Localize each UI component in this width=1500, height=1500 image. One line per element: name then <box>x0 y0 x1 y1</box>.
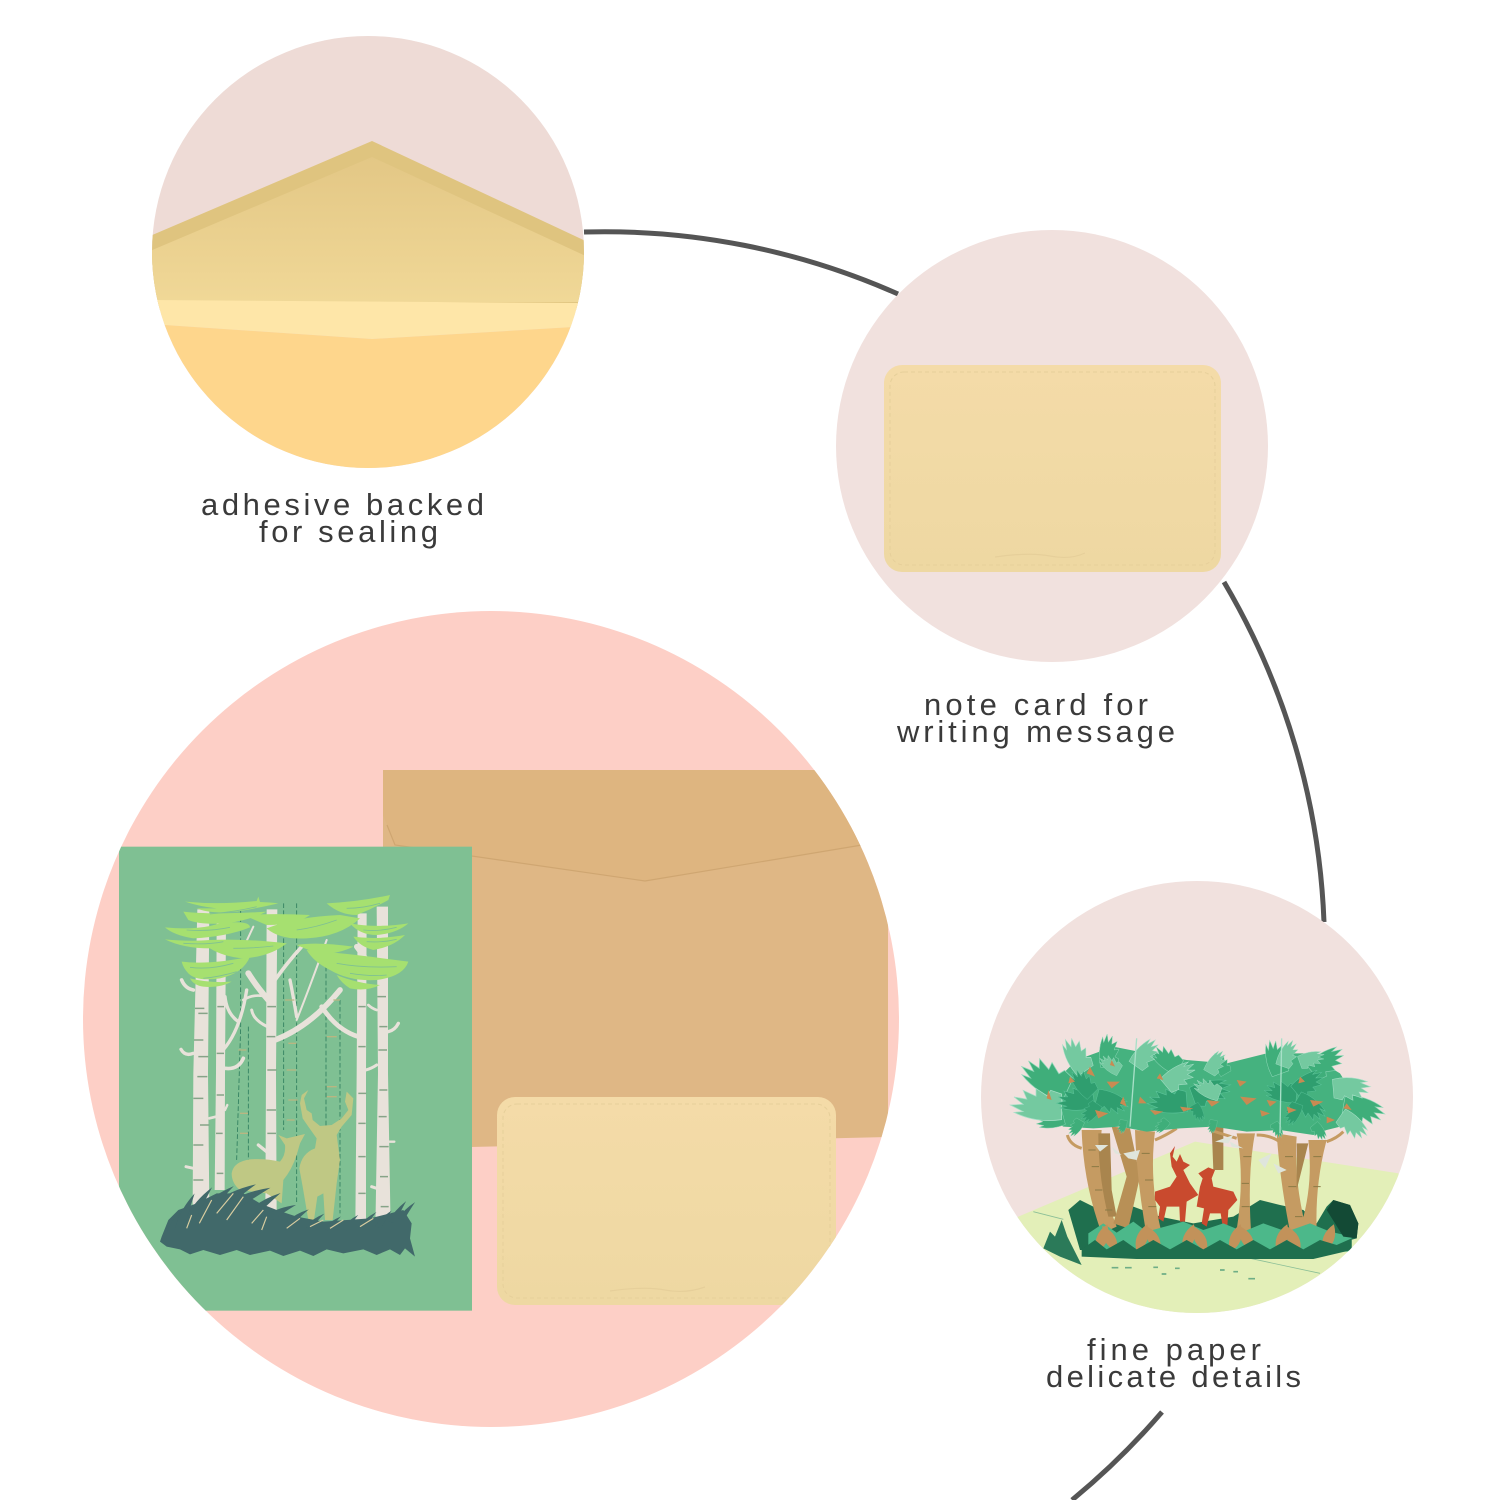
orange leaves row <box>1091 1222 1340 1254</box>
grass blades <box>167 1210 181 1233</box>
envelope body <box>150 324 590 470</box>
envelope <box>383 770 888 1147</box>
label: fine paper: delicate details <box>1046 1359 1301 1394</box>
grass slits <box>187 1193 373 1230</box>
connector arc: top <box>584 232 898 294</box>
grass <box>160 1184 415 1256</box>
label: note card <box>896 687 1175 749</box>
label: adhesive backed: for sealing <box>259 514 438 549</box>
note card <box>884 365 1221 572</box>
birds <box>1095 1135 1287 1173</box>
label: note card: writing message <box>896 714 1175 749</box>
outer fronds <box>1015 1033 1387 1143</box>
label: note card: note card for <box>924 687 1148 722</box>
envelope flap face <box>152 174 584 302</box>
inner fronds <box>1056 1070 1326 1126</box>
card fold lines <box>1033 1212 1320 1273</box>
note card <box>497 1097 836 1305</box>
envelope flap rim <box>150 141 590 310</box>
deer: stag <box>299 1090 353 1220</box>
label: adhesive backed <box>201 487 484 549</box>
bark marks <box>1088 1150 1321 1217</box>
green card <box>119 847 472 1311</box>
panel: adhesive flap circle <box>150 30 590 470</box>
open card pages <box>1018 1142 1399 1313</box>
label: fine paper: fine paper <box>1087 1332 1261 1367</box>
birch bark marks <box>193 997 389 1207</box>
faint tan bark marks <box>238 1000 340 1133</box>
right dark bush <box>1327 1200 1358 1238</box>
deer: red stag <box>1155 1146 1198 1222</box>
panel: pop-up forest circle <box>980 880 1415 1320</box>
canopy back <box>1037 1047 1357 1135</box>
card spine stems <box>1130 1038 1282 1133</box>
label: fine paper <box>1046 1332 1301 1394</box>
panel: large product circle <box>80 610 905 1435</box>
teal leaf band <box>1088 1222 1352 1252</box>
front undergrowth <box>1043 1200 1358 1265</box>
birch branches <box>181 927 398 1188</box>
note card signature <box>995 553 1085 557</box>
birch trunks <box>193 907 391 1230</box>
adhesive strip <box>150 300 590 339</box>
note card stitching <box>890 372 1215 565</box>
tree trunks <box>1082 1127 1326 1230</box>
branches <box>1067 1128 1343 1148</box>
leaf canopy <box>165 895 408 989</box>
left corner leaf <box>1043 1220 1082 1265</box>
deer: doe <box>232 1134 305 1203</box>
connector arc: bottom <box>1072 1412 1162 1500</box>
dashed background trees <box>237 903 340 1213</box>
label: adhesive backed: adhesive backed <box>201 487 484 522</box>
dark base band <box>1082 1238 1352 1259</box>
deer: red doe <box>1197 1167 1237 1227</box>
back undergrowth <box>1068 1200 1358 1250</box>
footprints <box>1112 1267 1255 1279</box>
connector arc: right <box>1224 582 1324 922</box>
panel: note card circle <box>836 230 1268 662</box>
canopy orange glimpses <box>1047 1060 1352 1123</box>
leaf cut lines <box>183 903 397 978</box>
